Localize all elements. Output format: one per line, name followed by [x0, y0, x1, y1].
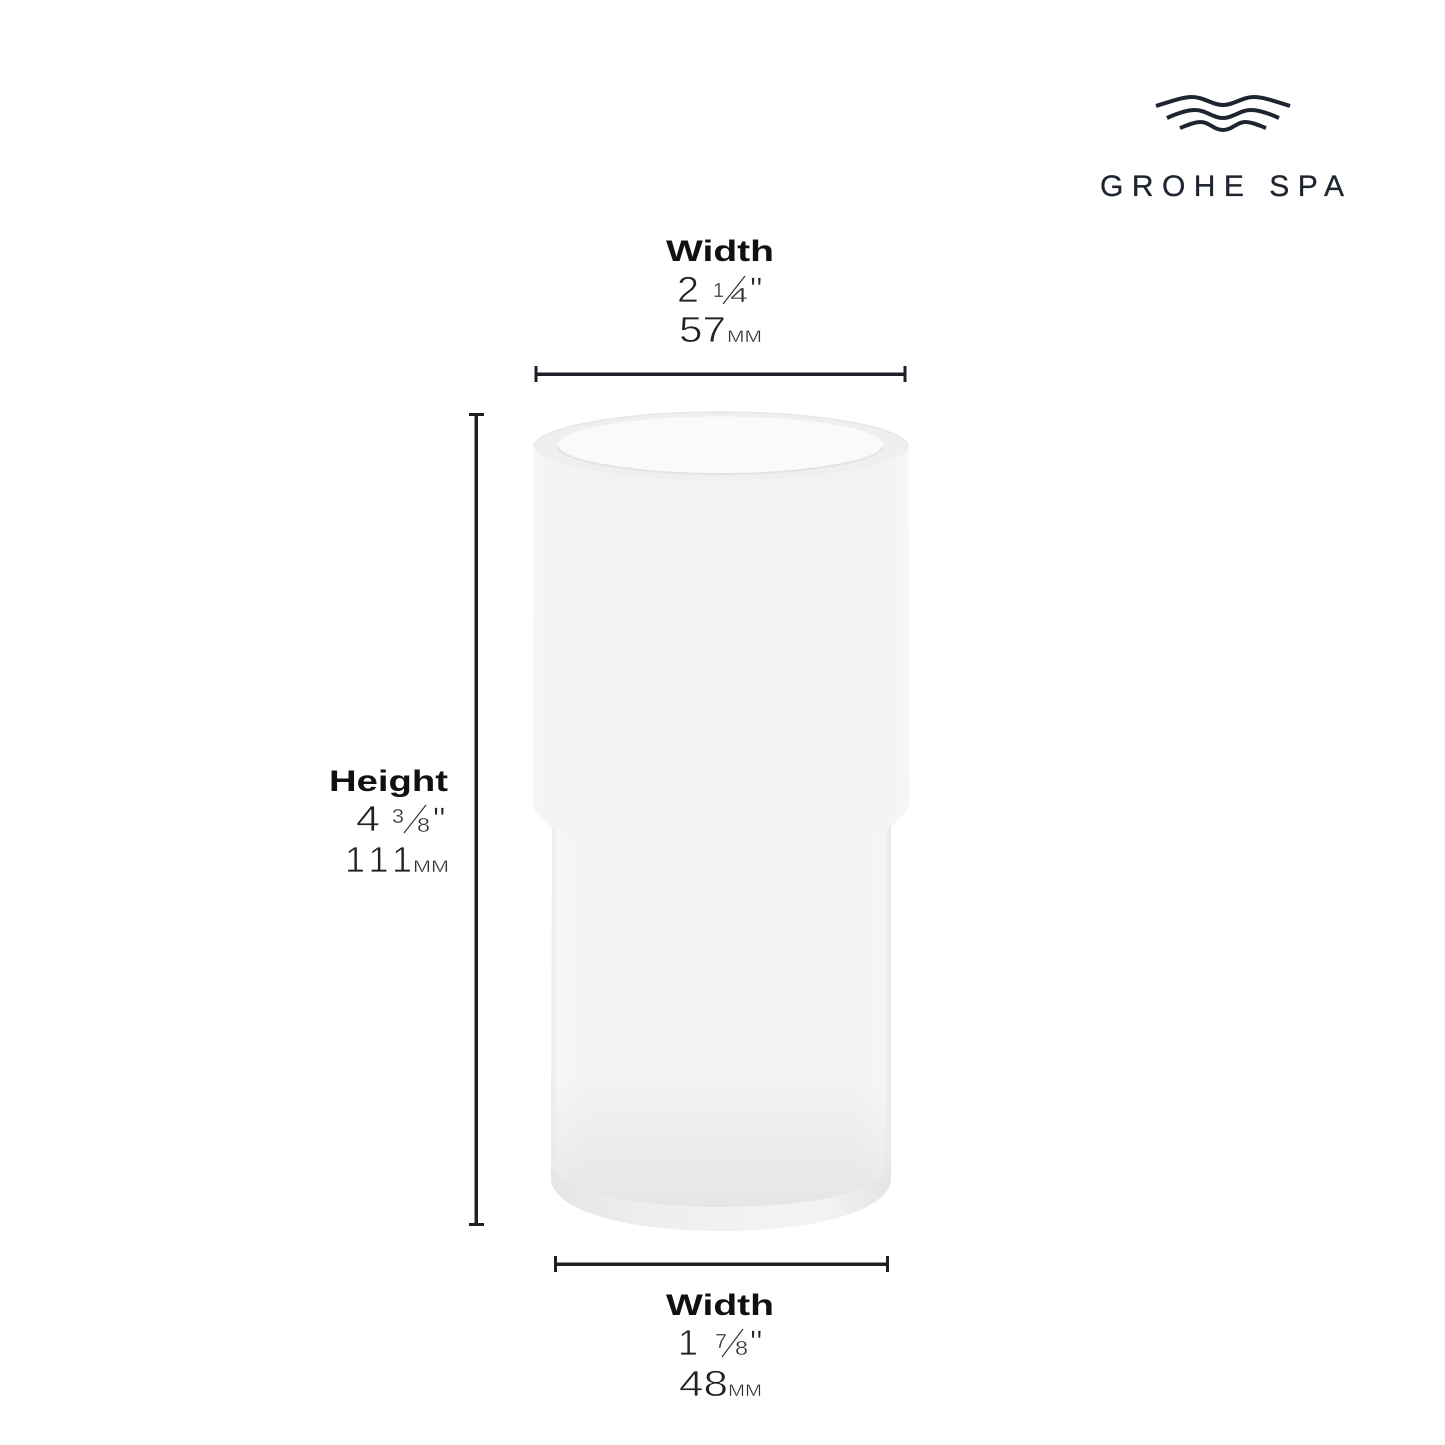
top width dimension bar: [534, 366, 906, 382]
upper sleeve: [533, 447, 909, 857]
top width label: 1: [713, 280, 724, 302]
top width label: 57: [679, 309, 726, 350]
lower glass body: [551, 820, 891, 1231]
top width label: 2: [677, 269, 699, 310]
height label: 8: [417, 815, 430, 837]
height dimension bar: [469, 413, 484, 1226]
top width label: MM: [727, 327, 762, 346]
frosted glass cup: [533, 412, 909, 1231]
bottom width label: 1: [678, 1322, 698, 1363]
logo: GROHE SPA: [1100, 97, 1344, 203]
bottom width label: 48: [679, 1363, 728, 1404]
height label: Height: [329, 765, 448, 798]
top width label: 4: [730, 285, 748, 307]
bottom width label: 8: [735, 1338, 748, 1360]
wordmark: GROHE SPA: [1100, 170, 1344, 203]
lower body shading: [553, 1080, 889, 1207]
bottom width label: ": [750, 1324, 762, 1363]
bottom width label: Width: [666, 1289, 774, 1322]
height label: 111: [345, 839, 412, 880]
top width label: [666, 235, 774, 350]
height label: 3: [392, 806, 404, 828]
height label: [329, 765, 449, 880]
height label: MM: [413, 857, 449, 876]
bottom width label: MM: [728, 1381, 762, 1400]
glass base: [551, 1166, 891, 1231]
height label: ": [433, 801, 445, 840]
bottom width label: [666, 1289, 774, 1404]
bottom width dimension bar: [554, 1256, 889, 1272]
cup opening: [558, 416, 884, 474]
top rim: [534, 412, 908, 480]
top width label: Width: [666, 235, 774, 268]
icon: three water waves: [1156, 97, 1290, 130]
top width label: ": [750, 271, 762, 310]
bottom width label: 7: [715, 1331, 727, 1353]
height label: 4: [356, 798, 380, 839]
